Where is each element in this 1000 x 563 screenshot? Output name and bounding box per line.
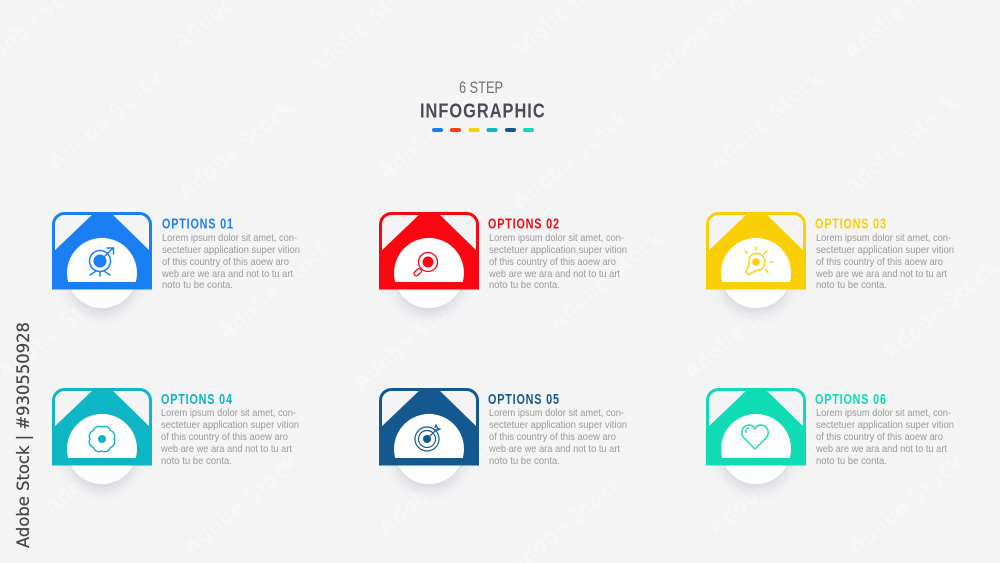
text block 06 <box>815 408 954 467</box>
text block 03 <box>815 233 954 291</box>
text block 05: Lorem ipsum dolor sit amet, con- <box>489 408 624 419</box>
watermark pattern: Adobe Stock <box>844 450 968 559</box>
text block 04: Lorem ipsum dolor sit amet, con- <box>161 408 296 419</box>
text block 04: noto tu be conta. <box>161 456 232 467</box>
heading: options 01: OPTIONS 01 <box>162 215 234 232</box>
badge 05 <box>379 388 479 484</box>
heading: options 03: OPTIONS 03 <box>815 215 887 232</box>
text block 04: sectetuer application super vition <box>161 420 299 431</box>
text block 03: of this country of this aoew aro <box>816 257 943 268</box>
watermark pattern: Adobe Stock <box>179 450 303 559</box>
watermark pattern: Adobe Stock <box>509 105 633 214</box>
heading: options 02: OPTIONS 02 <box>488 215 560 232</box>
watermark pattern: Adobe Stock <box>214 235 338 344</box>
watermark pattern: Adobe Stock <box>839 90 963 199</box>
panel: option 03 <box>706 212 954 308</box>
panel: option 04 <box>52 388 299 484</box>
text block 01: web are we ara and not to tu art <box>161 269 293 280</box>
icon: target with arrow <box>90 248 114 276</box>
icon: bullseye with dart <box>415 425 440 451</box>
panel: option 05 <box>379 388 627 484</box>
text block 05: noto tu be conta. <box>489 456 560 467</box>
text block 04: web are we ara and not to tu art <box>160 444 292 455</box>
icon: heart <box>742 425 768 449</box>
panel: option 02 <box>379 212 627 308</box>
watermark pattern: Adobe Stock <box>374 430 498 539</box>
text block 05 <box>488 408 627 467</box>
badge 04 <box>52 388 152 484</box>
watermark pattern: Adobe Stock <box>679 275 803 384</box>
text block 01 <box>161 233 300 291</box>
heading: infographic: INFOGRAPHIC <box>420 99 546 122</box>
text block 03: sectetuer application super vition <box>816 245 954 256</box>
text block 06: of this country of this aoew aro <box>816 432 943 443</box>
watermark pattern: Adobe Stock <box>704 430 828 539</box>
icon: magnifier <box>413 252 438 277</box>
text block 01: of this country of this aoew aro <box>162 257 289 268</box>
heading: options 05: OPTIONS 05 <box>488 390 560 407</box>
text block 03: noto tu be conta. <box>816 280 887 291</box>
text block 02: Lorem ipsum dolor sit amet, con- <box>489 233 624 244</box>
colour dots row <box>432 128 534 132</box>
text block 02: sectetuer application super vition <box>489 245 627 256</box>
heading: 6 step: 6 STEP <box>459 79 503 97</box>
text block 06: Lorem ipsum dolor sit amet, con- <box>816 408 951 419</box>
text block 01: sectetuer application super vition <box>162 245 300 256</box>
watermark pattern: Adobe Stock <box>39 410 163 519</box>
panel: option 06 <box>706 388 954 484</box>
text block 02: noto tu be conta. <box>489 280 560 291</box>
text block 04 <box>160 408 299 467</box>
text block 03: Lorem ipsum dolor sit amet, con- <box>816 233 951 244</box>
text block 05: of this country of this aoew aro <box>489 432 616 443</box>
text block 02: web are we ara and not to tu art <box>488 269 620 280</box>
panel: option 01 <box>52 212 300 308</box>
text block 04: of this country of this aoew aro <box>161 432 288 443</box>
text block 06: noto tu be conta. <box>816 456 887 467</box>
badge 01 <box>52 212 152 308</box>
heading: options 06: OPTIONS 06 <box>815 390 887 407</box>
watermark pattern: Adobe Stock <box>349 285 473 394</box>
text block 06: web are we ara and not to tu art <box>815 444 947 455</box>
text block 02 <box>488 233 627 291</box>
badge 02 <box>379 212 479 308</box>
icon: light bulb <box>745 247 773 275</box>
badge 03 <box>706 212 806 308</box>
badge 06 <box>706 388 806 484</box>
text block 01: noto tu be conta. <box>162 280 233 291</box>
text block 02: of this country of this aoew aro <box>489 257 616 268</box>
watermark pattern: Adobe Stock <box>174 95 298 204</box>
watermark pattern: Adobe Stock <box>879 255 1000 364</box>
text block 06: sectetuer application super vition <box>816 420 954 431</box>
text block 05: sectetuer application super vition <box>489 420 627 431</box>
watermark pattern: Adobe Stock <box>704 65 828 174</box>
watermark pattern: Adobe Stock <box>374 75 498 184</box>
text block 03: web are we ara and not to tu art <box>815 269 947 280</box>
watermark pattern: Adobe Stock <box>44 65 168 174</box>
icon: gear <box>89 426 115 452</box>
text block 05: web are we ara and not to tu art <box>488 444 620 455</box>
stock id label: Adobe Stock | #930550928 <box>14 322 33 548</box>
text block 01: Lorem ipsum dolor sit amet, con- <box>162 233 297 244</box>
watermark pattern: Adobe Stock <box>544 225 668 334</box>
heading: options 04: OPTIONS 04 <box>161 390 233 407</box>
title block <box>420 79 546 132</box>
